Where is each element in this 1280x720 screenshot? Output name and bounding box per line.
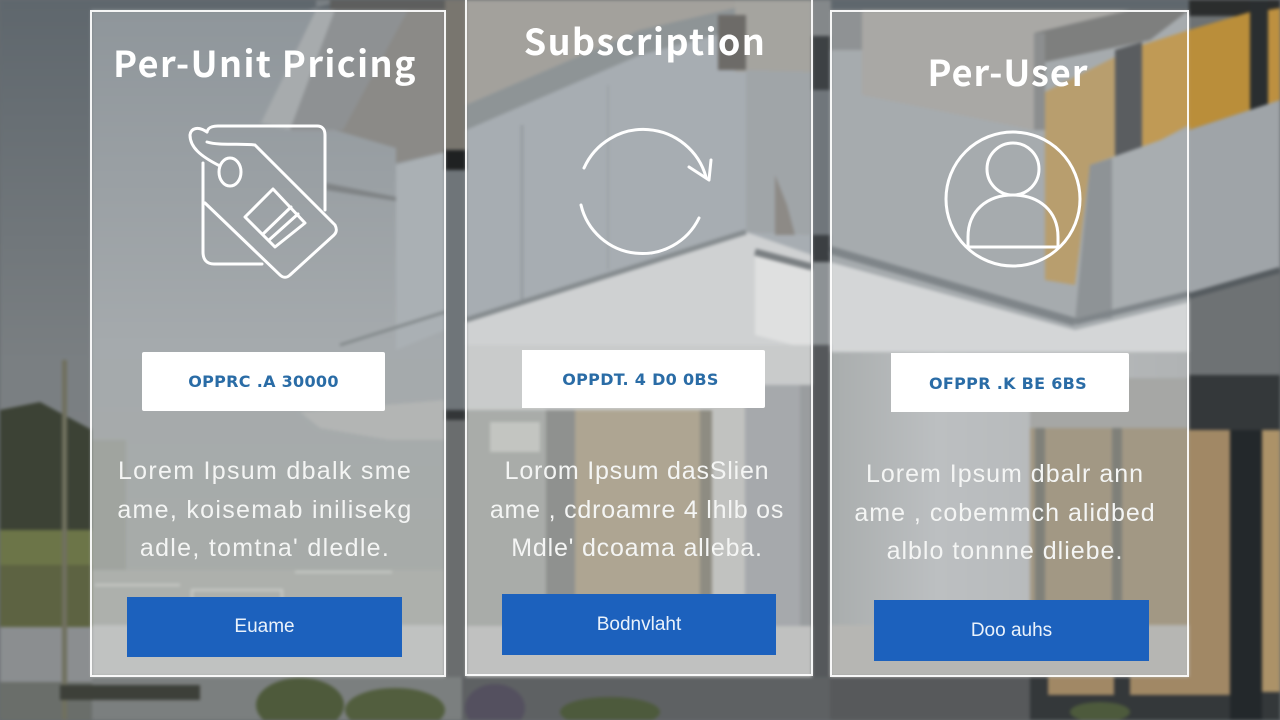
panel one interior	[91, 10, 445, 677]
price tag box: per-unit: OPPRC .A 30000	[188, 372, 339, 391]
description: subscription: Mdle' dcoama alleba.	[511, 534, 763, 562]
panel two interior	[466, 0, 812, 677]
panel: per-user	[830, 10, 1189, 677]
description: per-unit: Lorem Ipsum dbalk sme	[118, 457, 412, 485]
panel: per-unit pricing	[90, 10, 446, 677]
description: subscription: ame , cdroamre 4 lhlb os	[490, 496, 784, 524]
button: per-unit: Euame	[234, 616, 295, 637]
button: per-user	[874, 600, 1149, 661]
button: per-user: Doo auhs	[971, 620, 1052, 641]
description: per-user: alblo tonnne dliebe.	[887, 537, 1123, 565]
description: per-unit: ame, koisemab inilisekg	[117, 496, 413, 524]
icon: price tag	[188, 124, 338, 279]
description: subscription: Lorom Ipsum dasSlien	[505, 457, 769, 485]
button: subscription	[502, 594, 776, 655]
description: per-unit: adle, tomtna' dledle.	[140, 534, 390, 562]
description: per-user: Lorem Ipsum dbalr ann	[866, 460, 1144, 488]
icon: subscription cycle arrow	[580, 128, 712, 255]
price tag box: subscription: OPPDT. 4 D0 0BS	[562, 370, 719, 389]
panel three interior	[830, 10, 1189, 677]
description: subscription	[490, 457, 784, 562]
button: per-unit	[127, 597, 402, 657]
description: per-user	[854, 460, 1156, 565]
price tag box: subscription	[516, 350, 765, 408]
heading: subscription: Subscription	[524, 14, 766, 66]
panel: subscription	[465, 0, 813, 676]
description: per-user: ame , cobemmch alidbed	[854, 498, 1156, 526]
description: per-unit	[117, 457, 413, 562]
heading: per-user: Per-User	[927, 45, 1088, 97]
price tag box: per-unit	[142, 352, 385, 411]
gap between panels two and three	[812, 0, 831, 36]
price tag box: per-user	[887, 353, 1129, 412]
price tag box: per-user: OFPPR .K BE 6BS	[929, 374, 1087, 393]
right side outside panels	[1189, 0, 1280, 375]
icon: user in circle	[944, 130, 1082, 268]
heading: per-unit pricing: Per-Unit Pricing	[113, 36, 417, 88]
button: subscription: Bodnvlaht	[597, 614, 681, 635]
gap between panels one and two	[445, 0, 466, 150]
ground strip and planting	[92, 677, 462, 720]
